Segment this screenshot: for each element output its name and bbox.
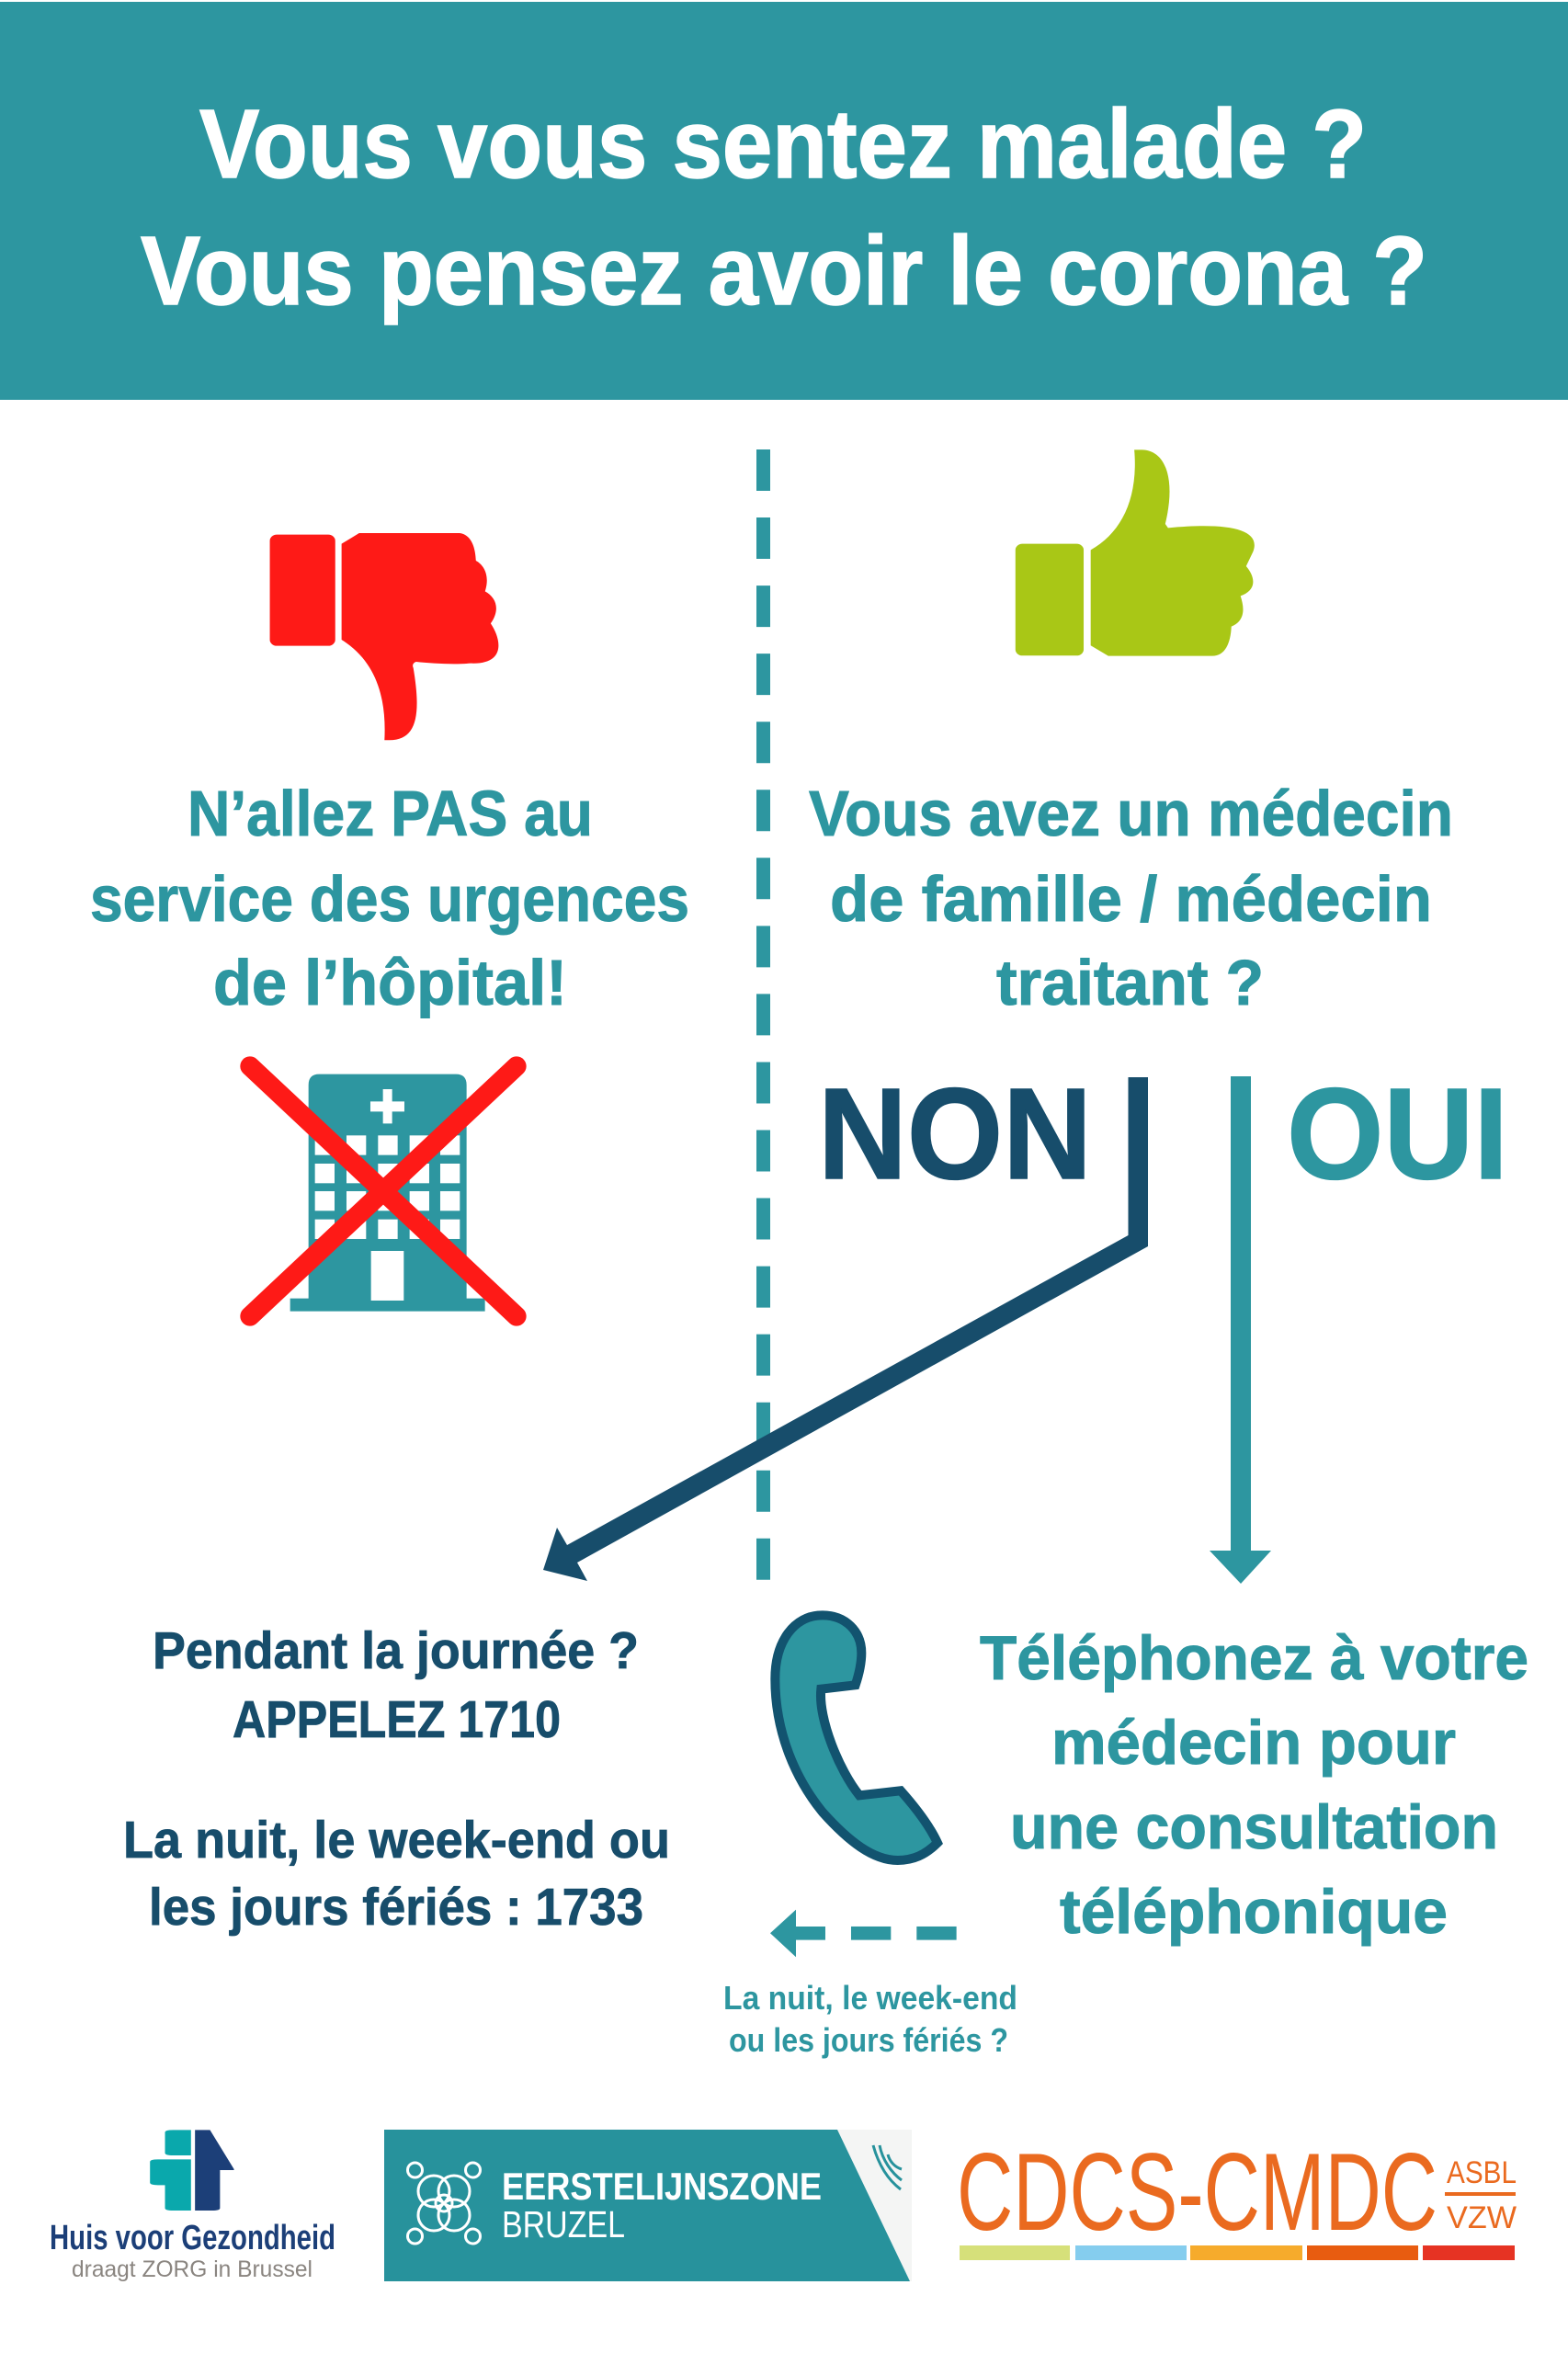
text: night and holidays note bbox=[723, 1979, 1017, 2059]
title: Vous vous sentez malade ? bbox=[199, 90, 1367, 199]
arrow: NON to bottom left bbox=[543, 1077, 1148, 1581]
text: night and holidays note: La nuit, le week-end bbox=[723, 1979, 1017, 2017]
text: phone numbers: La nuit, le week-end ou bbox=[123, 1811, 670, 1870]
icon: telephone bbox=[775, 1615, 937, 1860]
text: do not go to emergency: service des urgences bbox=[90, 863, 689, 935]
text: phone numbers bbox=[123, 1621, 670, 1937]
text: call your doctor bbox=[980, 1623, 1528, 1947]
text: family doctor question: traitant ? bbox=[996, 947, 1264, 1018]
text: phone numbers: les jours fériés : 1733 bbox=[149, 1878, 643, 1937]
icon: thumbs down bbox=[270, 533, 498, 740]
dashed divider bbox=[756, 449, 770, 1580]
text: do not go to emergency: N’allez PAS au bbox=[187, 778, 593, 849]
logo: Huis voor Gezondheid: draagt ZORG in Brussel bbox=[72, 2256, 312, 2282]
panel: header banner bbox=[0, 2, 1568, 400]
title bbox=[141, 90, 1427, 325]
text: call your doctor: une consultation bbox=[1010, 1792, 1498, 1862]
text: family doctor question: Vous avez un médecin bbox=[809, 778, 1453, 849]
text: call your doctor: Téléphonez à votre bbox=[980, 1623, 1528, 1693]
icon: leaf bbox=[873, 2145, 902, 2189]
logo: Huis voor Gezondheid bbox=[50, 2130, 335, 2282]
text: do not go to emergency: de l’hôpital! bbox=[213, 947, 567, 1018]
icon: thumbs up bbox=[1016, 449, 1255, 656]
title: Vous pensez avoir le corona ? bbox=[141, 217, 1427, 325]
text: call your doctor: médecin pour bbox=[1051, 1708, 1456, 1778]
label: OUI: OUI bbox=[1287, 1061, 1508, 1206]
logo: CDCS-CMDC: VZW bbox=[1447, 2200, 1517, 2235]
text: do not go to emergency bbox=[90, 778, 689, 1018]
text: family doctor question: de famille / médecin bbox=[830, 863, 1432, 935]
logo: Huis voor Gezondheid: Huis voor Gezondheid bbox=[50, 2219, 335, 2257]
label: NON: NON bbox=[818, 1061, 1092, 1206]
text: phone numbers: Pendant la journée ? bbox=[153, 1621, 639, 1680]
text: family doctor question bbox=[809, 778, 1453, 1018]
logo: Eerstelijnszone Bruzel: BRUZEL bbox=[502, 2203, 625, 2245]
text: call your doctor: téléphonique bbox=[1060, 1877, 1448, 1947]
arrow: dashed left bbox=[770, 1910, 957, 1957]
logo: CDCS-CMDC: ASBL bbox=[1447, 2155, 1517, 2190]
logo: Eerstelijnszone Bruzel: EERSTELIJNSZONE bbox=[502, 2165, 822, 2208]
icon: network bbox=[408, 2163, 480, 2244]
text: night and holidays note: ou les jours fériés ? bbox=[729, 2021, 1008, 2059]
icon: crossed out hospital bbox=[250, 1066, 517, 1316]
logo: Eerstelijnszone Bruzel bbox=[384, 2130, 912, 2281]
arrow: OUI down bbox=[1210, 1076, 1271, 1584]
text: phone numbers: APPELEZ 1710 bbox=[233, 1690, 561, 1749]
